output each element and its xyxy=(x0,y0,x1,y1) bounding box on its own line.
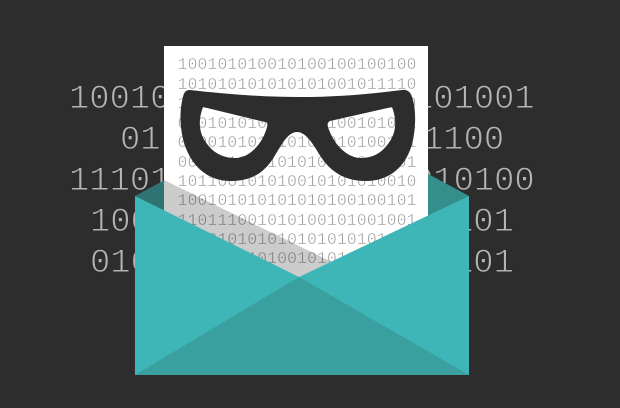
small binary text on paper: 010101010010100100101011 xyxy=(178,114,417,133)
small binary text on paper: 1010101010 xyxy=(178,268,277,287)
glasses icon xyxy=(180,90,415,181)
large binary text background: 1100 xyxy=(423,122,504,160)
large binary text background: 01 xyxy=(120,122,161,160)
large binary text background: 010 xyxy=(90,245,151,283)
small binary text on paper: 101010101010101001011110 xyxy=(178,75,416,94)
paper sheet xyxy=(164,46,428,326)
large binary text background: 101 xyxy=(453,245,514,283)
large binary text background: 101 xyxy=(453,204,514,242)
small binary text on paper: 1010100101001010101 xyxy=(178,249,367,268)
small binary text on paper: 100101010010100100100100 xyxy=(178,55,416,74)
small binary text on paper: 10101010101010101010101 xyxy=(178,230,407,249)
large binary text background: 100 xyxy=(90,204,151,242)
small binary text on paper: 010010101010101010100101 xyxy=(178,133,417,152)
small binary text on paper: 110111001010100101001001 xyxy=(178,211,417,230)
large binary text background: 11101 xyxy=(69,163,170,201)
small binary text on paper: 101100101010010101010010 xyxy=(178,172,416,191)
large binary text background: 101001 xyxy=(413,81,535,119)
small binary text on paper: 001011010101010101010101 xyxy=(178,153,417,172)
small binary text on paper: 100101010101010100100101 xyxy=(178,191,417,210)
envelope back flap xyxy=(135,106,469,290)
envelope side and top flaps xyxy=(135,196,469,375)
large binary text background xyxy=(69,81,535,283)
envelope front xyxy=(135,196,469,375)
large binary text background: 010100 xyxy=(413,163,535,201)
envelope bottom triangle xyxy=(135,277,469,375)
flap shadow on paper xyxy=(164,180,340,285)
large binary text background: 10010 xyxy=(69,81,170,119)
small binary text on paper xyxy=(178,55,417,287)
small binary text on paper: 110101010101001010101010 xyxy=(178,94,416,113)
